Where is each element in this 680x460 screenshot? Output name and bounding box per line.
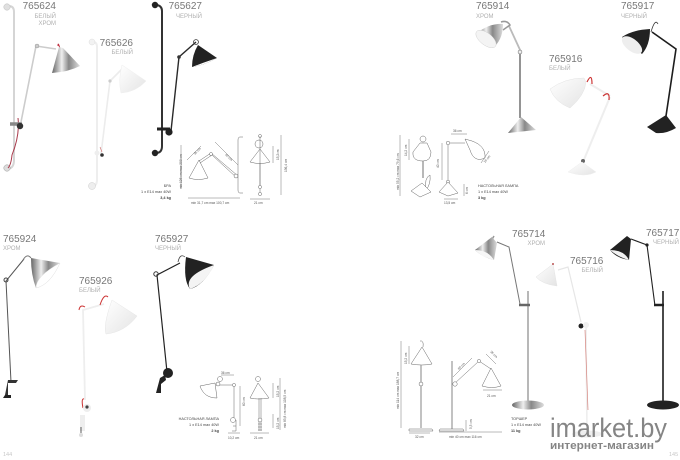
label 765927: ЧЕРНЫЙ [155,244,181,252]
lamp 765626 wall white [88,38,146,190]
page number right: 145 [669,452,678,458]
label 765914 [476,1,510,20]
dimension drawing: sconce front: 136,4 cm [284,159,288,172]
label 765717: 765717 [646,228,680,239]
spec text: floor lamp: ТОРШЕР [511,417,528,421]
label 765717: ЧЕРНЫЙ [653,238,679,246]
label 765716: БЕЛЫЙ [581,266,603,274]
lamp 765926 clamp white [79,276,137,437]
dimension drawing: floor lamp front: min 114 cm max 188,7 cm [396,372,400,409]
dimension drawing: clamp lamp side: 10,2 cm [228,436,240,440]
page number left: 144 [3,452,12,458]
spec text: clamp lamp: НАСТОЛЬНАЯ ЛАМПА [179,417,219,421]
label 765624: ХРОМ [38,21,56,27]
dimension drawing: floor lamp side: 60 cm [457,361,466,371]
label 765926: 765926 [79,276,113,287]
spec text: floor lamp: 11 kg [511,429,521,433]
spec text: sconce [141,184,172,200]
label 765626: БЕЛЫЙ [111,48,133,56]
dimension drawing: table lamp side: 6 cm [465,187,469,194]
dimension drawing: floor lamp front: 15,2 cm [404,352,408,364]
lamp 765716 floor white [536,256,604,438]
watermark logo: imarket.by [550,413,667,443]
spec text: sconce: 3,4 kg [160,196,172,200]
label 765917: ЧЕРНЫЙ [621,12,647,20]
label 765926 [79,276,113,294]
label 765624 [23,1,56,27]
lamp 765717 floor black [610,228,680,410]
dimension drawing: floor lamp front [396,341,433,439]
label 765927 [155,234,189,252]
dimension drawing: clamp lamp side: 60 cm [242,397,246,406]
label 765916: БЕЛЫЙ [549,64,571,72]
dimension drawing: sconce front [250,134,288,205]
dimension drawing: clamp lamp front: 15,2 cm [276,417,280,429]
lamp 765916 table white [549,54,610,175]
label 765716 [570,256,604,274]
label 765714: ХРОМ [527,241,545,247]
label 765924 [3,234,37,252]
label 765626: 765626 [100,38,133,49]
spec text: floor lamp: 1 x E14 max 40W [511,423,541,427]
lamp 765927 clamp black [154,234,214,393]
dimension drawing: floor lamp front: 32 cm [415,435,424,439]
label 765717 [646,228,680,246]
label 765916 [549,54,583,72]
label 765716: 765716 [570,256,604,267]
spec text: clamp lamp: 1 x E14 max 40W [189,423,219,427]
dimension drawing: floor lamp side: 36 cm [489,350,499,359]
dimension drawing: clamp lamp front: 15,2 cm [276,385,280,397]
lamp 765627 wall black [152,1,217,156]
spec text: sconce: БРА [164,184,171,188]
spec text: floor lamp [511,417,541,433]
label 765627: ЧЕРНЫЙ [176,12,202,20]
lamp 765714 floor chrome [475,229,546,410]
lamp 765914 table chrome [473,1,536,133]
dimension drawing: sconce front: 21 cm [254,201,263,205]
label 765714: 765714 [512,229,546,240]
label 765714 [512,229,546,247]
spec text: table lamp [478,184,519,200]
dimension drawing: floor lamp side: 5,3 cm [469,419,473,429]
lamp 765924 clamp chrome [3,234,60,398]
dimension drawing: clamp lamp side [200,371,246,440]
dimension drawing: table lamp front: 14,2 cm [404,144,408,156]
label 765914: 765914 [476,1,510,12]
dimension drawing: sconce side: min 128 cm max 200 cm [179,154,183,189]
label 765627: 765627 [169,1,202,12]
dimension drawing: table lamp side: 40 cm [436,159,440,168]
dimension drawing: sconce front: 15,2cm [276,149,280,160]
spec text: sconce: 1 x E14 max 40W [141,190,171,194]
dimension drawing: clamp lamp front: 21 cm [254,436,263,440]
label 765917: 765917 [621,1,655,12]
dimension drawing: clamp lamp front [250,376,287,440]
label 765624: 765624 [23,1,56,12]
dimension drawing: sconce side: 36 cm [193,146,202,156]
dimension drawing: table lamp side: 13,5 cm [444,201,456,205]
spec text: table lamp: 3 kg [478,196,486,200]
dimension drawing: sconce side: 60 cm [224,153,234,162]
label 765914: ХРОМ [476,14,494,20]
dimension drawing: floor lamp side: min 40 cm max 116 cm [449,435,482,439]
dimension drawing: table lamp side [436,129,492,205]
label 765624: БЕЛЫЙ [34,12,56,20]
label 765924: ХРОМ [3,246,21,252]
label 765927: 765927 [155,234,189,245]
label 765917 [621,1,655,20]
label 765626 [100,38,133,56]
dimension drawing: table lamp side: 15 cm [483,154,492,164]
label 765916: 765916 [549,54,583,65]
spec text: table lamp: НАСТОЛЬНАЯ ЛАМПА [478,184,519,188]
dimension drawing: sconce side: min 31,7 cm max 100,7 cm [191,201,230,205]
spec text: clamp lamp: 2 kg [211,429,220,433]
spec text: clamp lamp [179,417,220,433]
dimension drawing: floor lamp side [439,350,502,439]
label 765924: 765924 [3,234,37,245]
label 765627 [169,1,202,20]
lamp 765917 table black [619,1,676,133]
dimension drawing: clamp lamp side: 36 cm [221,371,230,375]
dimension drawing: table lamp front: min 55,2 cm max 79,6 cm [396,153,400,190]
dimension drawing: table lamp side: 36 cm [453,129,462,133]
dimension drawing: clamp lamp front: min 83,8 cm max 108,5 cm [283,389,287,428]
label 765926: БЕЛЫЙ [79,286,101,294]
spec text: table lamp: 1 x E14 max 40W [478,190,508,194]
lamp 765624 wall chrome [4,1,80,171]
watermark logo: интернет-магазин [550,440,654,452]
dimension drawing: table lamp front [396,135,431,197]
dimension drawing: sconce side [179,137,243,205]
dimension drawing: floor lamp side: 21 cm [487,394,496,398]
